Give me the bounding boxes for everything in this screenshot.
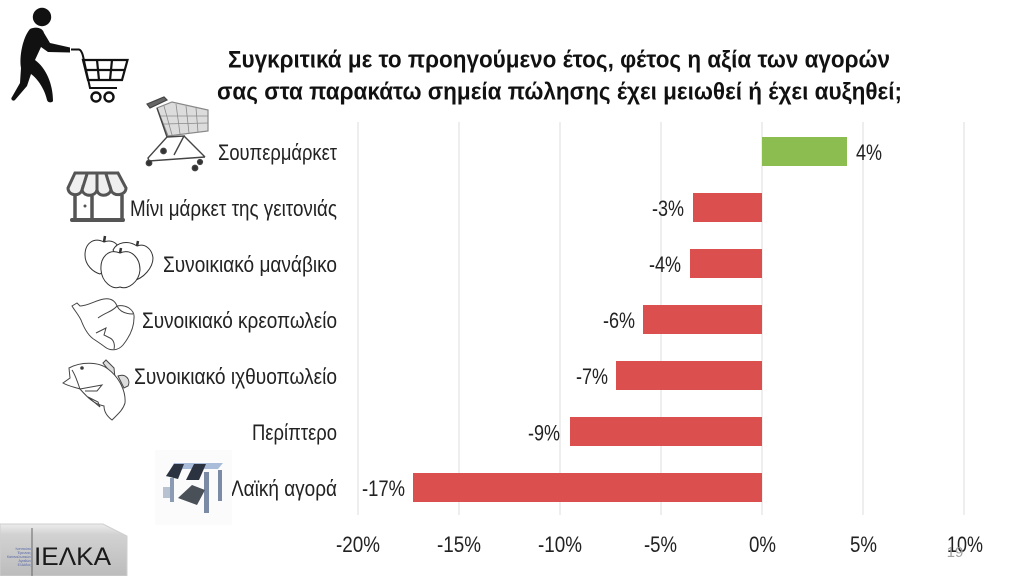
- bar chart: [130, 122, 983, 557]
- value labels: [362, 140, 882, 501]
- value labels: -7%: [576, 364, 608, 389]
- title: σας στα παρακάτω σημεία πώλησης έχει μειωθεί ή έχει αυξηθεί;: [217, 78, 902, 106]
- logo: ΙΕΛΚΑ: [0, 524, 127, 576]
- value labels: -4%: [649, 252, 681, 277]
- value labels: -17%: [362, 476, 405, 501]
- category labels: Συνοικιακό ιχθυοπωλείο: [134, 364, 337, 389]
- bars: [413, 137, 847, 502]
- logo: ΙΕΛΚΑ: ΙΕΛΚΑ: [34, 543, 111, 571]
- page number: 19: [947, 544, 963, 561]
- axis labels: 0%: [749, 532, 776, 557]
- logo tagline: Ελλάδος: [18, 563, 31, 567]
- icon: chicken: [72, 299, 134, 350]
- category labels: Περίπτερο: [252, 420, 337, 445]
- title: Συγκριτικά με το προηγούμενο έτος, φέτος η αξία των αγορών: [228, 46, 890, 74]
- axis labels: -5%: [644, 532, 677, 557]
- value labels: -3%: [652, 196, 684, 221]
- title: [217, 46, 902, 106]
- category labels: Μίνι μάρκετ της γειτονιάς: [130, 196, 337, 221]
- category labels: [130, 140, 337, 501]
- value labels: -9%: [528, 420, 560, 446]
- logo tagline: Καταναλωτικών: [7, 555, 31, 559]
- value labels: -6%: [603, 308, 635, 333]
- icon: shopper pushing trolley: [11, 8, 127, 102]
- icon: supermarket trolley: [146, 97, 208, 171]
- logo tagline: Έρευνας: [16, 551, 31, 555]
- logo tagline: Αγαθών: [19, 559, 31, 563]
- axis labels: [336, 532, 983, 557]
- icon: street market stall: [155, 450, 232, 525]
- category labels: Συνοικιακό μανάβικο: [163, 252, 337, 277]
- value labels: 4%: [856, 140, 882, 165]
- logo tagline: [7, 547, 31, 567]
- icon: fish: [63, 360, 129, 420]
- axis labels: -15%: [437, 532, 481, 557]
- logo tagline: Ινστιτούτο: [15, 547, 31, 551]
- category labels: Λαϊκή αγορά: [231, 476, 337, 501]
- icon: mini market storefront: [68, 173, 126, 222]
- axis labels: 5%: [850, 532, 877, 557]
- axis labels: -20%: [336, 532, 380, 557]
- category labels: Συνοικιακό κρεοπωλείο: [142, 308, 337, 333]
- axis labels: 10%: [947, 532, 983, 557]
- category labels: Σουπερμάρκετ: [218, 140, 337, 165]
- axis labels: -10%: [538, 532, 582, 557]
- icon: apples: [85, 236, 153, 288]
